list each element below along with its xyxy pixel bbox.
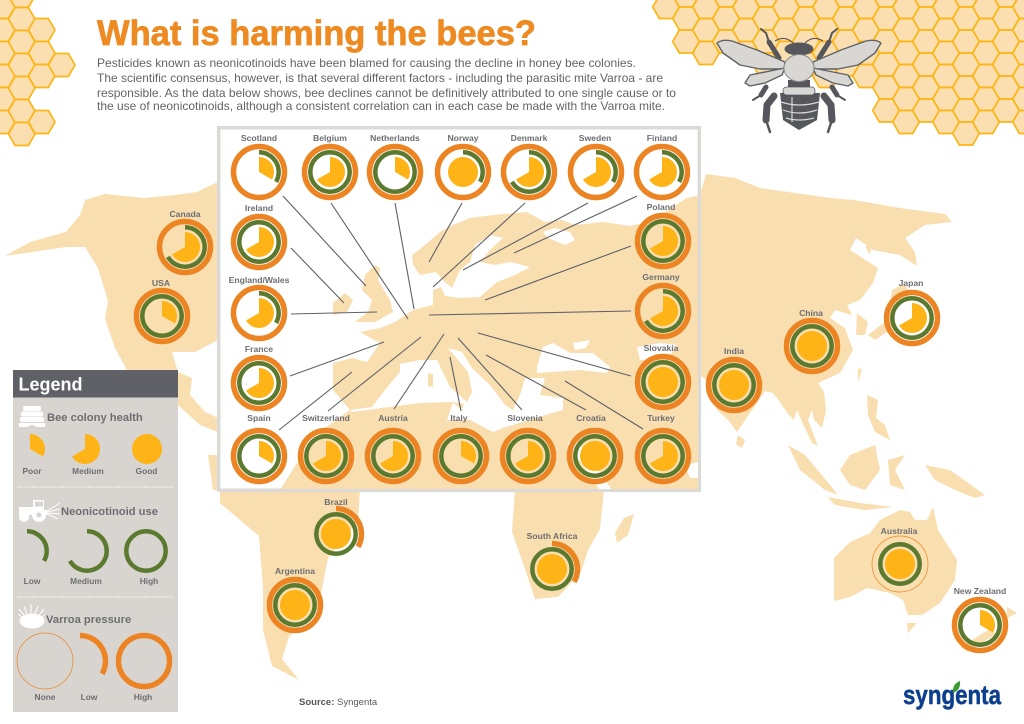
heading: bee colony health: Bee colony health (47, 412, 143, 424)
legend heading: Legend (18, 374, 83, 394)
legend: poor colony health (22, 434, 45, 476)
chart: South Africa (527, 531, 578, 589)
icon: bee (717, 29, 881, 132)
legend: high varroa pressure: High (134, 692, 152, 702)
intro text (97, 56, 676, 113)
legend: low varroa pressure (80, 636, 105, 702)
chart: Scotland (234, 133, 284, 198)
logo: Syngenta: syngenta (903, 680, 1002, 710)
chart: Japan (886, 278, 938, 344)
legend: low neonicotinoid use (24, 531, 47, 586)
chart: France (234, 344, 284, 408)
chart: China (786, 308, 838, 372)
chart: Sweden (570, 133, 622, 198)
chart: Canada: Canada (169, 209, 201, 219)
intro text: responsible. As the data below shows, bee declines cannot be definitively attributed to one single cause or to (97, 86, 676, 100)
chart: Switzerland: Switzerland (302, 413, 350, 423)
chart: Norway (438, 133, 488, 198)
heading: varroa pressure: Varroa pressure (46, 614, 131, 626)
chart: Brazil (316, 497, 361, 554)
chart: Ireland: Ireland (245, 203, 273, 213)
chart: USA (136, 278, 188, 342)
source note: Source: Syngenta (299, 697, 378, 708)
chart: England/Wales: England/Wales (229, 275, 290, 285)
chart: Australia (872, 526, 928, 592)
chart: Norway: Norway (447, 133, 479, 143)
world map (5, 174, 1017, 680)
legend: medium colony health (72, 434, 104, 476)
chart: Netherlands: Netherlands (370, 133, 420, 143)
legend: medium neonicotinoid use: Medium (70, 576, 102, 586)
chart: Canada (160, 209, 210, 272)
chart: Denmark (504, 133, 554, 198)
title: What is harming the bees? (97, 14, 536, 53)
chart: Sweden: Sweden (579, 133, 611, 143)
panel: Europe inset (219, 128, 700, 490)
intro text: the use of neonicotinoids, although a consistent correlation can in each case be made with the Varroa mite. (97, 99, 665, 113)
chart: Austria (368, 413, 418, 482)
chart: Netherlands (370, 133, 420, 198)
heading: neonicotinoid use: Neonicotinoid use (61, 506, 158, 518)
chart: Italy: Italy (450, 413, 468, 423)
chart: Ireland (234, 203, 284, 268)
icon: tractor (19, 500, 60, 522)
chart: India: India (724, 346, 744, 356)
chart: Croatia: Croatia (576, 413, 606, 423)
chart: Slovakia (638, 343, 688, 408)
chart: France: France (245, 344, 273, 354)
icon: beehive (19, 406, 45, 427)
legend: poor colony health: Poor (22, 466, 42, 476)
legend: no varroa pressure: None (35, 692, 56, 702)
legend: low neonicotinoid use: Low (24, 576, 41, 586)
chart: Spain (234, 413, 284, 482)
legend: high neonicotinoid use (126, 531, 166, 586)
chart: Japan: Japan (899, 278, 923, 288)
chart: Belgium: Belgium (313, 133, 347, 143)
intro text: The scientific consensus, however, is that several different factors - including the parasitic mite Varroa - are (97, 71, 663, 85)
chart: Croatia (570, 413, 620, 482)
chart: Turkey: Turkey (647, 413, 675, 423)
chart: Finland (636, 133, 688, 198)
chart: Poland (638, 202, 688, 266)
icon: varroa mite (18, 604, 45, 628)
chart: New Zealand: New Zealand (954, 586, 1006, 596)
legend: no varroa pressure (17, 633, 73, 702)
chart: Switzerland (300, 413, 352, 482)
chart: Argentina (270, 566, 320, 630)
leader lines (279, 196, 643, 430)
legend: low varroa pressure: Low (81, 692, 98, 702)
panel: legend (13, 370, 178, 712)
legend: medium colony health: Medium (72, 466, 104, 476)
chart: England/Wales (229, 275, 290, 338)
chart: Argentina: Argentina (275, 566, 315, 576)
chart: Poland: Poland (647, 202, 675, 212)
chart: Germany: Germany (642, 272, 680, 282)
chart: New Zealand (954, 586, 1006, 650)
honeycomb: top left (0, 0, 75, 146)
chart: Denmark: Denmark (511, 133, 548, 143)
chart: Brazil: Brazil (324, 497, 348, 507)
chart: Finland: Finland (647, 133, 677, 143)
chart: Germany (638, 272, 688, 336)
chart: Spain: Spain (247, 413, 271, 423)
chart: Slovakia: Slovakia (644, 343, 679, 353)
legend: good colony health (132, 434, 162, 476)
chart: Italy (436, 413, 486, 482)
legend: high neonicotinoid use: High (140, 576, 158, 586)
chart: Belgium (304, 133, 356, 198)
legend: high varroa pressure (118, 636, 170, 702)
legend: good colony health: Good (136, 466, 157, 476)
honeycomb: top right (653, 0, 1024, 145)
chart: China: China (799, 308, 823, 318)
chart: South Africa: South Africa (527, 531, 578, 541)
legend: medium neonicotinoid use (70, 531, 107, 586)
chart: Slovenia (502, 413, 554, 482)
chart: Scotland: Scotland (241, 133, 277, 143)
chart: India (708, 346, 760, 410)
chart: Turkey (638, 413, 688, 482)
chart: Austria: Austria (378, 413, 408, 423)
intro text: Pesticides known as neonicotinoids have been blamed for causing the decline in honey bee colonies. (97, 56, 636, 70)
chart: USA: USA (152, 278, 170, 288)
chart: Australia: Australia (881, 526, 918, 536)
chart: Slovenia: Slovenia (507, 413, 543, 423)
